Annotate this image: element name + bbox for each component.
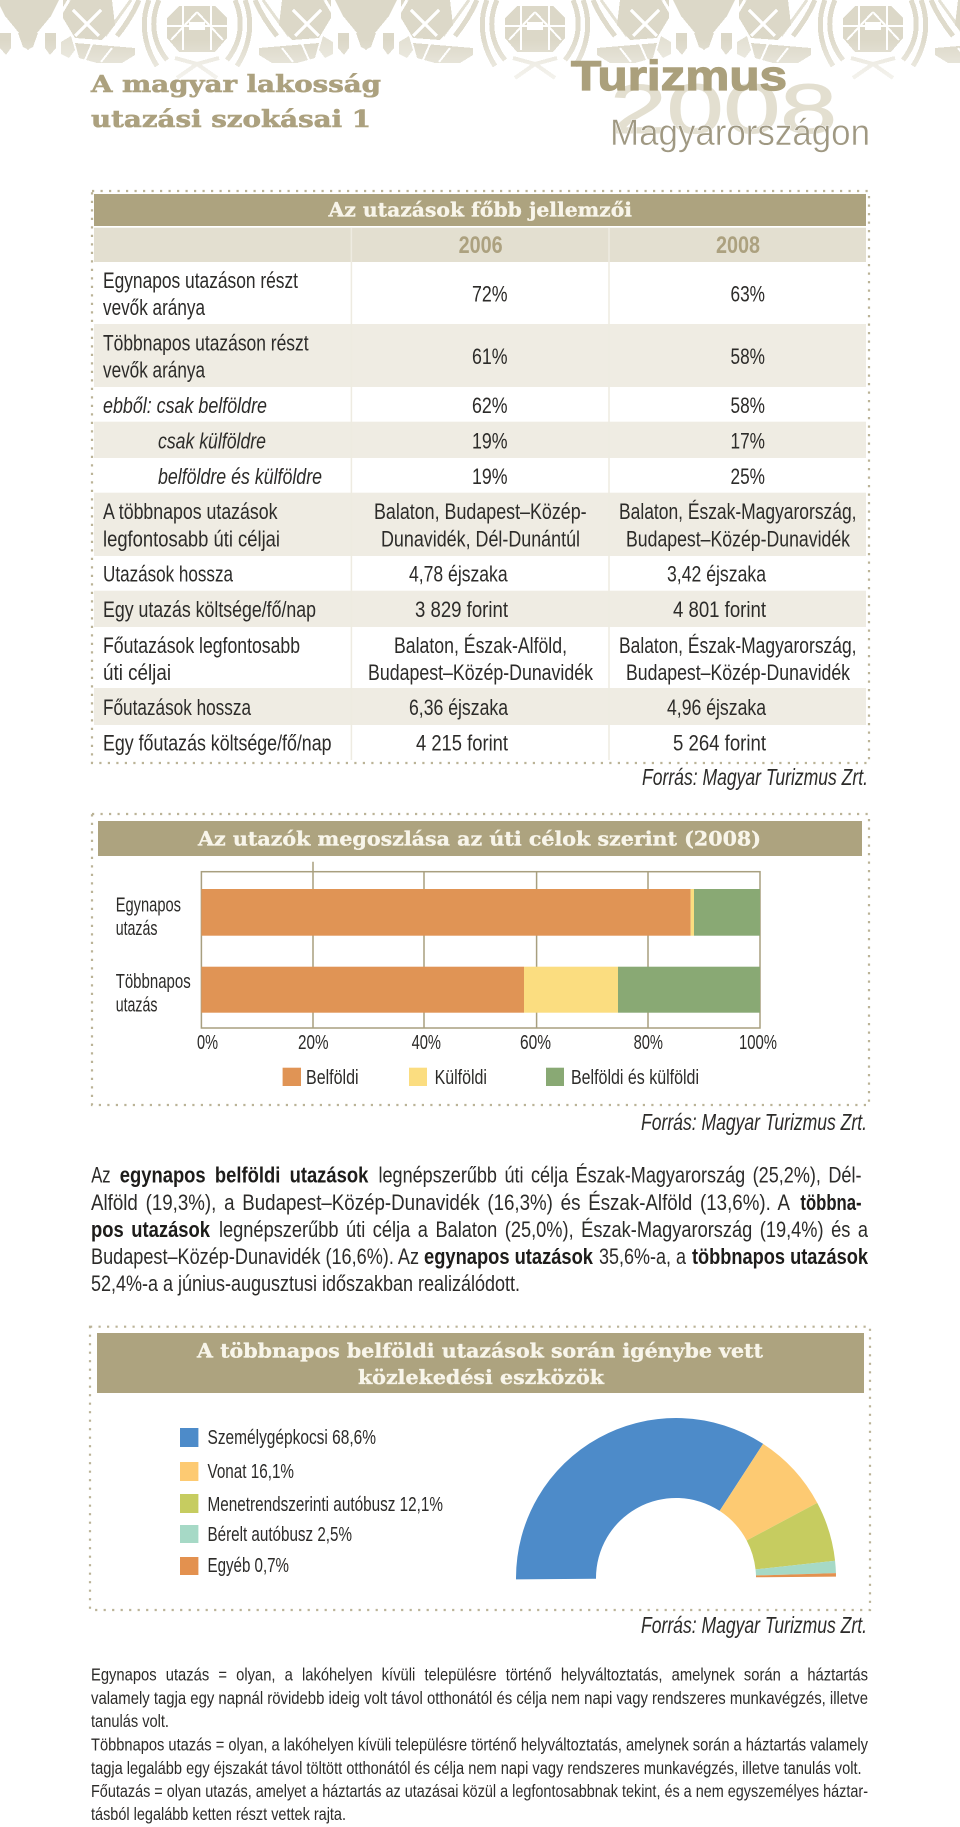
- chart legend: Belföldi és külföldi: [571, 1067, 699, 1089]
- row: utazás költsége: 3 829 forint: [415, 597, 508, 622]
- chart legend: Belföldi: [306, 1067, 359, 1089]
- row: csak külföldre: 17%: [730, 429, 765, 454]
- pie legend: Személygépkocsi 68,6%: [208, 1427, 376, 1449]
- pie legend: Vonat 16,1%: [208, 1461, 294, 1483]
- row: belföldre és külföldre: 19%: [472, 464, 508, 489]
- axis labels: 80%: [634, 1032, 663, 1054]
- row: többnapos arány: [103, 331, 765, 383]
- body paragraph: többna-: [800, 1190, 862, 1215]
- category labels: [116, 895, 191, 1017]
- body paragraph: egynapos belföldi utazások: [120, 1163, 369, 1188]
- title: A magyar lakosság utazási szokásai 1: A magyar lakosság: [90, 70, 381, 98]
- pie legend: Menetrendszerinti autóbusz 12,1%: [208, 1494, 443, 1516]
- row: többnapos arány: 58%: [730, 344, 765, 369]
- row: többnapos úti célok: legfontosabb úti céljai: [103, 527, 280, 552]
- row: egynapos arány: 63%: [730, 282, 765, 307]
- row: belföldre és külföldre: 25%: [730, 464, 765, 489]
- chart legend: [283, 1067, 699, 1089]
- axis labels: [197, 1032, 777, 1054]
- axis labels: 20%: [298, 1032, 329, 1054]
- row: főutazások úti céljai: Balaton, Észak-Alföld,: [394, 633, 567, 658]
- table title bar: Az utazások főbb jellemzői: [327, 199, 632, 222]
- table title bar: [94, 194, 866, 226]
- row: csak külföldre: [158, 429, 765, 454]
- source note: pie: Forrás: Magyar Turizmus Zrt.: [641, 1612, 867, 1638]
- row: többnapos úti célok: [103, 499, 856, 552]
- axis labels: 100%: [739, 1032, 777, 1054]
- row: utazások hossza: [103, 562, 767, 587]
- category labels: utazás: [116, 995, 158, 1017]
- row: utazás költsége: 4 801 forint: [673, 597, 766, 622]
- body paragraph: Az: [91, 1163, 111, 1188]
- row: főutazások hossza: [103, 695, 767, 720]
- body paragraph: [91, 1163, 869, 1296]
- row: többnapos arány: 61%: [472, 344, 508, 369]
- body paragraph: legnépszerűbb úti célja Észak-Magyarország (25,2%), Dél-: [378, 1163, 862, 1188]
- row: főutazások hossza: Főutazások hossza: [103, 695, 252, 720]
- body paragraph: Alföld (19,3%), a Budapest–Közép-Dunavidék (16,3%) és Észak-Alföld (13,6%). A: [91, 1190, 790, 1215]
- row: főutazás költsége: [103, 731, 766, 756]
- chart title bar: [98, 821, 862, 856]
- row: főutazások úti céljai: úti céljai: [103, 660, 171, 685]
- row: főutazások hossza: 6,36 éjszaka: [409, 695, 509, 720]
- body paragraph: pos utazások: [91, 1217, 211, 1242]
- row: utazások hossza: 4,78 éjszaka: [409, 562, 508, 587]
- row: utazás költsége: Egy utazás költsége/fő/nap: [103, 597, 316, 622]
- logotype: Turizmus 2008 Magyarországon: Turizmus: [571, 52, 787, 99]
- row: többnapos úti célok: A többnapos utazások: [103, 499, 278, 524]
- row: csak belföldre: 58%: [730, 393, 765, 418]
- logotype: Turizmus 2008 Magyarországon: Magyarországon: [610, 112, 870, 153]
- row: többnapos úti célok: Budapest–Közép-Dunavidék: [626, 527, 851, 552]
- year header row: 2008: [716, 232, 760, 259]
- tinted row backgrounds: [94, 324, 866, 725]
- row: többnapos arány: Többnapos utazáson részt: [103, 331, 309, 356]
- category labels: Többnapos: [116, 971, 191, 993]
- row: főutazás költsége: Egy főutazás költsége/fő/nap: [103, 731, 332, 756]
- pie legend: Bérelt autóbusz 2,5%: [208, 1524, 352, 1546]
- panel: közlekedési eszközök: [90, 1327, 870, 1610]
- row: csak külföldre: 19%: [472, 429, 508, 454]
- footnote definitions: tásból legalább ketten részt vettek rajta.: [91, 1804, 346, 1824]
- row: egynapos arány: Egynapos utazáson részt: [103, 268, 298, 293]
- body paragraph: többnapos utazások: [692, 1244, 869, 1269]
- column separators: [351, 228, 609, 760]
- pie title bar: közlekedési eszközök: [358, 1366, 605, 1389]
- year header row: [94, 228, 866, 262]
- row: belföldre és külföldre: [158, 464, 765, 489]
- source note: table: Forrás: Magyar Turizmus Zrt.: [642, 764, 868, 790]
- title: A magyar lakosság utazási szokásai 1: utazási szokásai 1: [91, 105, 371, 133]
- axis labels: 0%: [197, 1032, 218, 1054]
- row: főutazás költsége: 5 264 forint: [673, 731, 766, 756]
- body paragraph: Budapest–Közép-Dunavidék (16,6%). Az: [91, 1244, 419, 1269]
- pie legend: [180, 1427, 443, 1577]
- row: főutazás költsége: 4 215 forint: [416, 731, 508, 756]
- row: utazások hossza: Utazások hossza: [103, 562, 234, 587]
- panel: Az utazások főbb jellemzői table: [92, 191, 869, 763]
- row: belföldre és külföldre: belföldre és külföldre: [158, 464, 322, 489]
- footnote definitions: [91, 1665, 868, 1824]
- chart title bar: Az utazók megoszlása az úti célok szerint (2008): [197, 828, 761, 851]
- year header row: 2006: [459, 232, 503, 259]
- body paragraph: egynapos utazások: [424, 1244, 594, 1269]
- pie legend: Egyéb 0,7%: [208, 1555, 289, 1577]
- category labels: Egynapos: [116, 895, 181, 917]
- row: utazás költsége: [103, 597, 766, 622]
- footnote definitions: tanulás volt.: [91, 1711, 169, 1731]
- row: főutazások hossza: 4,96 éjszaka: [667, 695, 767, 720]
- row: csak belföldre: ebből: csak belföldre: [103, 393, 267, 418]
- row: csak belföldre: [103, 393, 765, 418]
- decorative lace header band: [0, 0, 960, 85]
- logotype: Turizmus 2008 Magyarországon: 2008: [610, 70, 837, 148]
- row: egynapos arány: vevők aránya: [103, 295, 206, 320]
- title: A magyar lakosság utazási szokásai 1: [90, 70, 381, 133]
- row: csak külföldre: csak külföldre: [158, 429, 266, 454]
- axis labels: 60%: [520, 1032, 551, 1054]
- row: csak belföldre: 62%: [472, 393, 508, 418]
- row: utazások hossza: 3,42 éjszaka: [667, 562, 767, 587]
- stacked bar chart: [116, 862, 777, 1054]
- pie title bar: [97, 1333, 864, 1393]
- chart legend: Külföldi: [435, 1067, 487, 1089]
- row: többnapos úti célok: Balaton, Észak-Magyarország,: [619, 499, 856, 524]
- row: főutazások úti céljai: Budapest–Közép-Dunavidék: [626, 660, 851, 685]
- category labels: utazás: [116, 918, 158, 940]
- row: többnapos úti célok: Balaton, Budapest–Közép-: [374, 499, 587, 524]
- row: egynapos arány: 72%: [472, 282, 508, 307]
- row: többnapos arány: vevők aránya: [103, 358, 206, 383]
- row: főutazások úti céljai: Budapest–Közép-Dunavidék: [368, 660, 594, 685]
- panel: Az utazók megoszlása: [92, 814, 869, 1105]
- pie title bar: A többnapos belföldi utazások során igénybe vett: [196, 1340, 763, 1363]
- bar: egynapos utazás: [201, 889, 760, 936]
- source note: bar chart: Forrás: Magyar Turizmus Zrt.: [641, 1109, 867, 1135]
- row: egynapos arány: [103, 268, 765, 320]
- logotype: Turizmus 2008 Magyarországon: [571, 52, 870, 153]
- semi-donut chart: [515, 1417, 836, 1579]
- bar: többnapos utazás: [201, 967, 760, 1013]
- body paragraph: 52,4%-a a június-augusztusi időszakban realizálódott.: [91, 1271, 520, 1296]
- row: főutazások úti céljai: Balaton, Észak-Magyarország,: [619, 633, 856, 658]
- row: többnapos úti célok: Dunavidék, Dél-Dunántúl: [381, 527, 580, 552]
- row: főutazások úti céljai: [103, 633, 856, 685]
- row: főutazások úti céljai: Főutazások legfontosabb: [103, 633, 300, 658]
- axis labels: 40%: [412, 1032, 441, 1054]
- body paragraph: 35,6%-a, a: [599, 1244, 687, 1269]
